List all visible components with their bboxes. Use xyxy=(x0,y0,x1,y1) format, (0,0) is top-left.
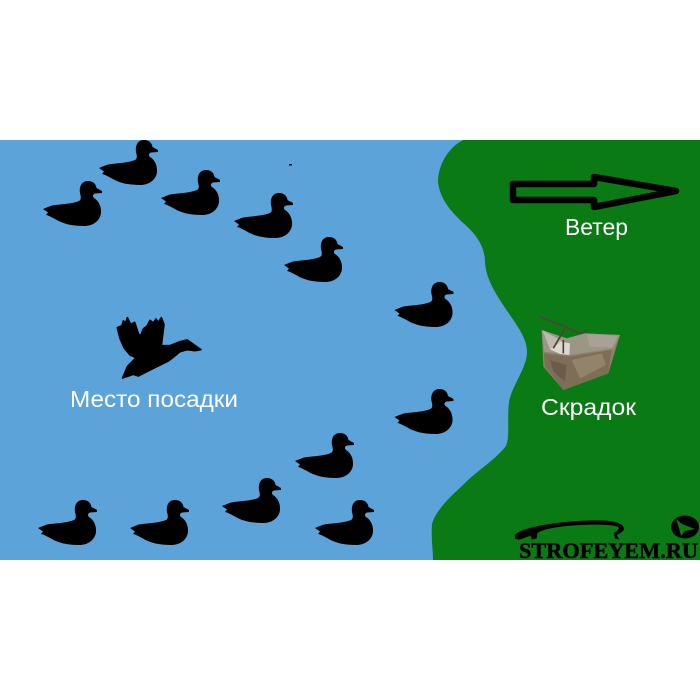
label: blind: Скрадок xyxy=(541,394,637,420)
icon: flying duck xyxy=(117,318,201,378)
arrow: wind direction xyxy=(513,177,676,207)
logo: strofeyem xyxy=(515,516,699,563)
icon: hunting blind xyxy=(539,317,620,390)
water xyxy=(0,140,700,560)
decoy ducks xyxy=(38,140,454,545)
label: landing spot: Место посадки xyxy=(70,386,238,412)
icon: fishing rod xyxy=(515,520,624,540)
icon: logo bird xyxy=(671,516,699,538)
label: wind: Ветер xyxy=(565,214,628,240)
hunting diagram xyxy=(0,140,700,560)
text: site name: STROFEYEM.RU xyxy=(519,538,698,563)
shore xyxy=(432,140,700,560)
